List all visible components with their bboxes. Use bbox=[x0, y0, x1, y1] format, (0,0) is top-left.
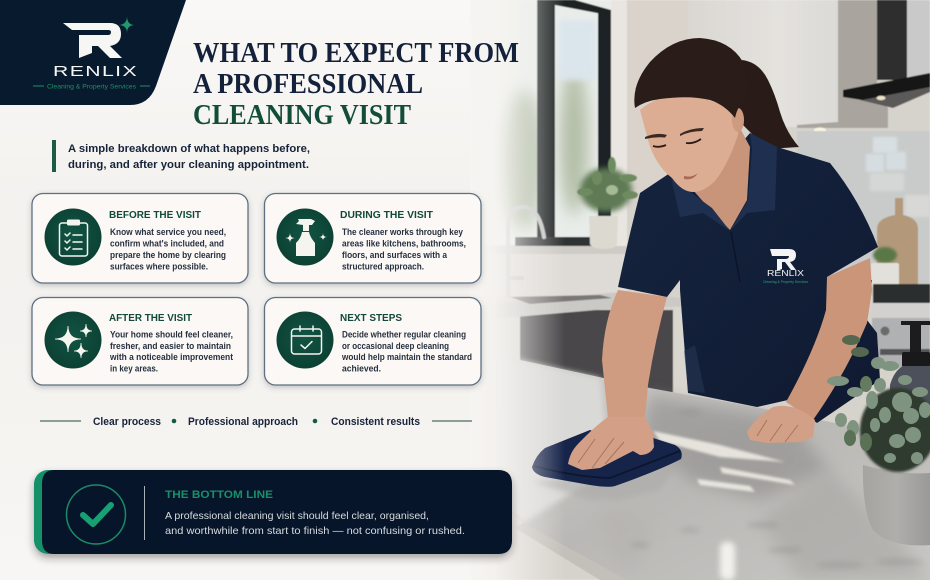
icon: check mark in circle bbox=[66, 485, 126, 544]
ponytail bbox=[737, 60, 799, 149]
backsplash tiles bbox=[797, 131, 930, 296]
card: before the visit: confirm what's included, and bbox=[110, 238, 224, 248]
logo panel bbox=[0, 0, 186, 105]
card: during the visit: structured approach. bbox=[342, 260, 424, 272]
card: during the visit bbox=[264, 194, 481, 283]
card: before the visit: prepare the home by clearing bbox=[110, 249, 226, 260]
tagline row: Consistent results bbox=[331, 416, 420, 428]
shirt logo: Cleaning & Property Services bbox=[763, 280, 808, 284]
card: during the visit: areas like kitchens, bathrooms, bbox=[342, 238, 466, 248]
card: during the visit: floors, and surfaces with a bbox=[342, 249, 448, 260]
tagline row bbox=[40, 416, 472, 428]
collar bbox=[670, 133, 777, 231]
soap dispenser bbox=[890, 321, 930, 441]
bottom line panel bbox=[34, 470, 512, 554]
stove and oven bbox=[872, 284, 930, 368]
logo tagline: Cleaning & Property Services bbox=[47, 84, 137, 90]
range hood bbox=[843, 0, 930, 108]
card: after the visit bbox=[32, 298, 248, 385]
title: CLEANING VISIT bbox=[193, 100, 411, 131]
subtitle with accent bar bbox=[52, 140, 310, 172]
potted plant bbox=[827, 335, 930, 545]
logo star bbox=[118, 16, 135, 33]
hair bbox=[634, 38, 748, 118]
card: during the visit: The cleaner works through key bbox=[342, 226, 464, 237]
card: after the visit: with a noticeable improvement bbox=[109, 351, 233, 362]
card: before the visit bbox=[32, 194, 248, 283]
card: next steps: NEXT STEPS bbox=[340, 312, 402, 324]
card: next steps: achieved. bbox=[342, 362, 381, 374]
card: next steps: Decide whether regular cleaning bbox=[342, 328, 466, 340]
cutting board bbox=[877, 198, 918, 285]
subtitle with accent bar: A simple breakdown of what happens before, bbox=[68, 143, 310, 155]
bottom line panel: A professional cleaning visit should feel clear, organised, bbox=[165, 510, 429, 522]
person: cleaner in navy polo bbox=[602, 38, 880, 443]
hand wiping cloth bbox=[568, 417, 654, 470]
card: next steps: or occasional deep cleaning bbox=[342, 340, 449, 351]
shirt body bbox=[618, 133, 880, 423]
logo wordmark: RENLIX bbox=[53, 63, 138, 80]
wall cabinet bbox=[688, 0, 838, 127]
logo mark bbox=[63, 23, 122, 58]
left background panel with fade bbox=[0, 0, 565, 580]
card: next steps bbox=[264, 298, 481, 385]
card: during the visit: DURING THE VISIT bbox=[340, 209, 434, 221]
placket bbox=[731, 232, 740, 282]
bottom line panel: and worthwhile from start to finish — not confusing or rushed. bbox=[165, 525, 465, 537]
window frame bbox=[515, 0, 611, 246]
tagline row: Professional approach bbox=[188, 416, 298, 428]
icon: spray bottle bbox=[276, 208, 334, 266]
shirt fold bbox=[684, 345, 705, 393]
small pot and herb bbox=[871, 247, 899, 287]
window glass bbox=[480, 0, 612, 245]
icon: clipboard bbox=[44, 208, 102, 266]
card: after the visit: Your home should feel cleaner, bbox=[110, 328, 233, 340]
title bbox=[193, 38, 519, 131]
card: after the visit: AFTER THE VISIT bbox=[109, 312, 193, 324]
icon: calendar bbox=[276, 312, 334, 368]
window sill and lower wall bbox=[480, 246, 627, 296]
tagline row: Clear process bbox=[93, 416, 161, 428]
microfibre cloth bbox=[532, 430, 682, 487]
bottom line panel: THE BOTTOM LINE bbox=[165, 489, 273, 501]
title: WHAT TO EXPECT FROM bbox=[193, 38, 519, 69]
marble countertop bbox=[497, 355, 930, 580]
marble veining bbox=[630, 410, 924, 568]
card: next steps: would help maintain the standard bbox=[341, 351, 472, 362]
card: before the visit: Know what service you need, bbox=[110, 226, 226, 237]
facial features bbox=[645, 128, 704, 139]
ear bbox=[732, 108, 744, 132]
plant on sill bbox=[577, 157, 638, 249]
hand: right bbox=[747, 406, 815, 443]
arm: right bbox=[786, 258, 872, 420]
title: A PROFESSIONAL bbox=[193, 69, 423, 100]
subtitle with accent bar: during, and after your cleaning appointment. bbox=[68, 159, 309, 171]
faucet bbox=[508, 207, 544, 296]
card: before the visit: surfaces where possible. bbox=[110, 260, 208, 272]
neck bbox=[693, 128, 750, 230]
face bbox=[640, 95, 742, 192]
shirt logo bbox=[763, 249, 808, 284]
back counter and cabinets bbox=[480, 292, 700, 396]
card: after the visit: in key areas. bbox=[110, 362, 158, 374]
arm: left bbox=[602, 290, 667, 420]
icon: sparkles bbox=[44, 312, 102, 368]
card: after the visit: fresher, and easier to maintain bbox=[110, 340, 231, 351]
card: before the visit: BEFORE THE VISIT bbox=[109, 209, 202, 221]
photo: kitchen background bbox=[470, 0, 930, 580]
shirt logo: RENLIX bbox=[767, 269, 805, 278]
